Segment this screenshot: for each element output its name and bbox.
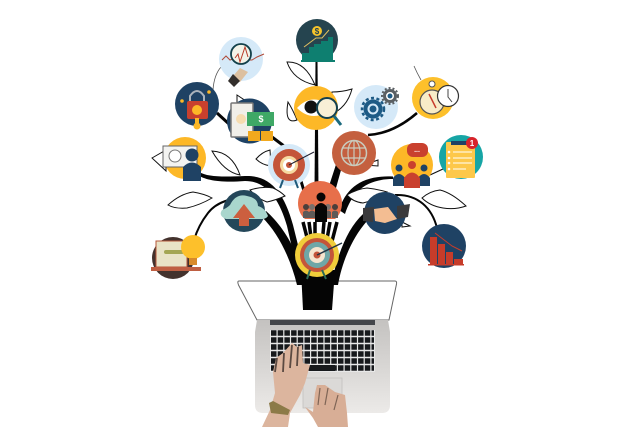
icon: light bulb and browser xyxy=(151,235,205,279)
tree xyxy=(152,60,466,310)
icon: globe xyxy=(332,131,376,175)
icon: declining bar chart xyxy=(422,224,466,268)
speech dots: ... xyxy=(414,147,420,154)
left hand with watch xyxy=(262,343,310,427)
icon: checklist xyxy=(439,135,483,179)
centre stem xyxy=(314,60,318,190)
icon: small target xyxy=(268,144,314,188)
icon: presentation xyxy=(163,137,206,181)
icon: team discussion xyxy=(391,143,433,188)
wristwatch xyxy=(269,401,290,415)
icon: large target xyxy=(295,233,342,279)
right lower branch xyxy=(331,214,367,285)
short connectors xyxy=(217,113,304,191)
laptop screen xyxy=(238,281,397,320)
icon: magnified line chart xyxy=(219,37,264,87)
hinge xyxy=(270,320,375,325)
thin right branch to chart xyxy=(395,195,437,228)
right stem xyxy=(329,143,348,188)
icon: growth chart xyxy=(296,19,338,62)
fan of stems xyxy=(303,222,337,245)
left lower branch xyxy=(262,211,306,285)
icon: handshake xyxy=(363,192,410,234)
globe branch to stopwatch xyxy=(368,113,417,135)
keyboard xyxy=(270,330,375,372)
thin left branch to bulb xyxy=(194,197,254,240)
right upper branch xyxy=(339,176,393,214)
icon: eye and magnifier xyxy=(294,86,341,130)
dollar sign: $ xyxy=(258,114,264,124)
dollar sign: $ xyxy=(315,27,320,36)
laptop xyxy=(238,281,397,427)
right hand xyxy=(305,385,348,427)
laptop base xyxy=(255,320,390,413)
trackpad xyxy=(303,378,342,408)
icon: gears xyxy=(354,85,398,129)
icon: padlock xyxy=(175,82,219,130)
left upper branch xyxy=(198,172,303,265)
icon: stopwatch and clock xyxy=(412,77,458,119)
icon: cloud upload xyxy=(221,190,268,232)
leaves xyxy=(152,62,466,227)
icon: money on phone xyxy=(227,98,274,144)
notification number: 1 xyxy=(470,139,475,148)
trunk xyxy=(301,270,335,310)
icon: leader and team xyxy=(298,181,342,222)
